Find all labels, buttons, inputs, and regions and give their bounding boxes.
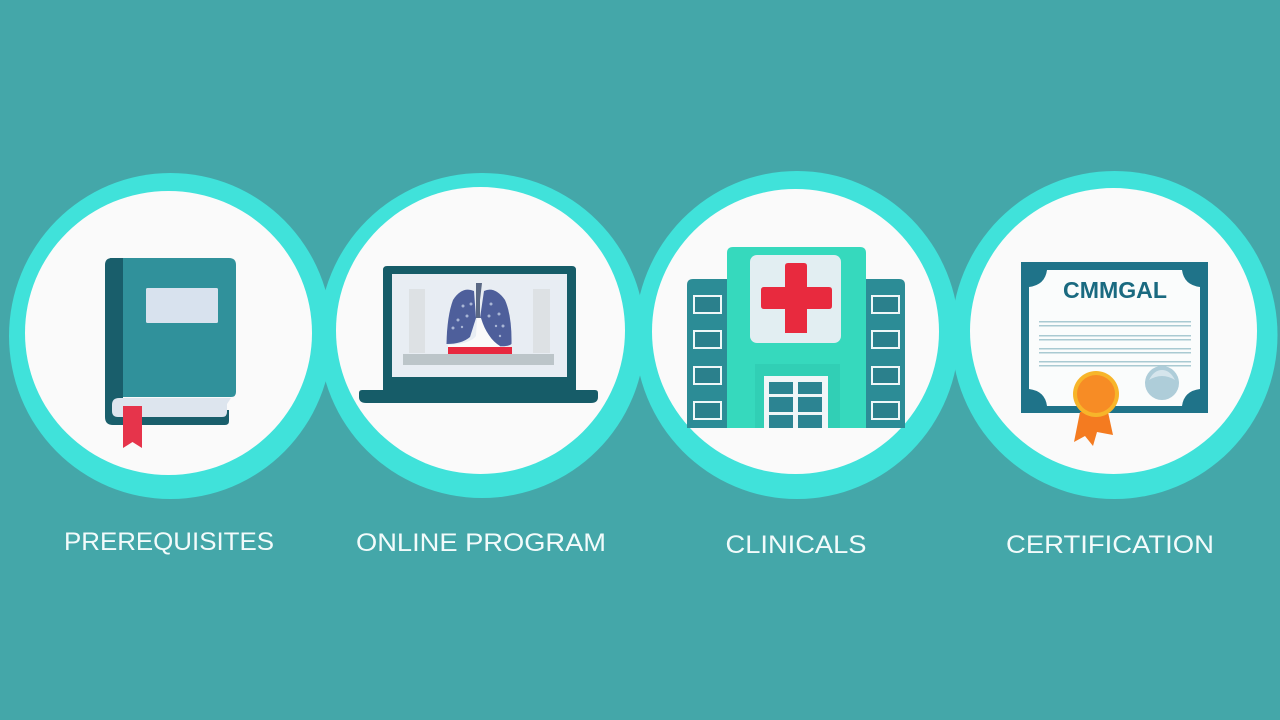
label: clinicals: CLINICALS: [726, 531, 866, 559]
icon: laptop with lungs: [359, 266, 598, 403]
certificate title: CMMGAL: [1063, 277, 1167, 303]
panel: prerequisites: [25, 191, 312, 556]
label: prerequisites: PREREQUISITES: [64, 528, 274, 556]
icon: ribbon seal: [1073, 371, 1119, 446]
panel: certification: [970, 188, 1257, 559]
icon: book: [105, 258, 236, 448]
circle: online program badge: [336, 187, 625, 474]
rings: turquoise circle outlines: [9, 171, 1278, 499]
panel: online program: [336, 187, 625, 557]
icon: hospital: [687, 247, 905, 428]
label: certification: CERTIFICATION: [1006, 531, 1214, 559]
circle: clinicals badge: [652, 189, 939, 474]
icon: certificate: [1021, 262, 1208, 446]
panel: clinicals: [652, 189, 939, 559]
circle: certification badge: [970, 188, 1257, 474]
illustration: lungs: [446, 283, 512, 346]
circle: prerequisites badge: [25, 191, 312, 475]
label: online program: ONLINE PROGRAM: [356, 529, 606, 557]
